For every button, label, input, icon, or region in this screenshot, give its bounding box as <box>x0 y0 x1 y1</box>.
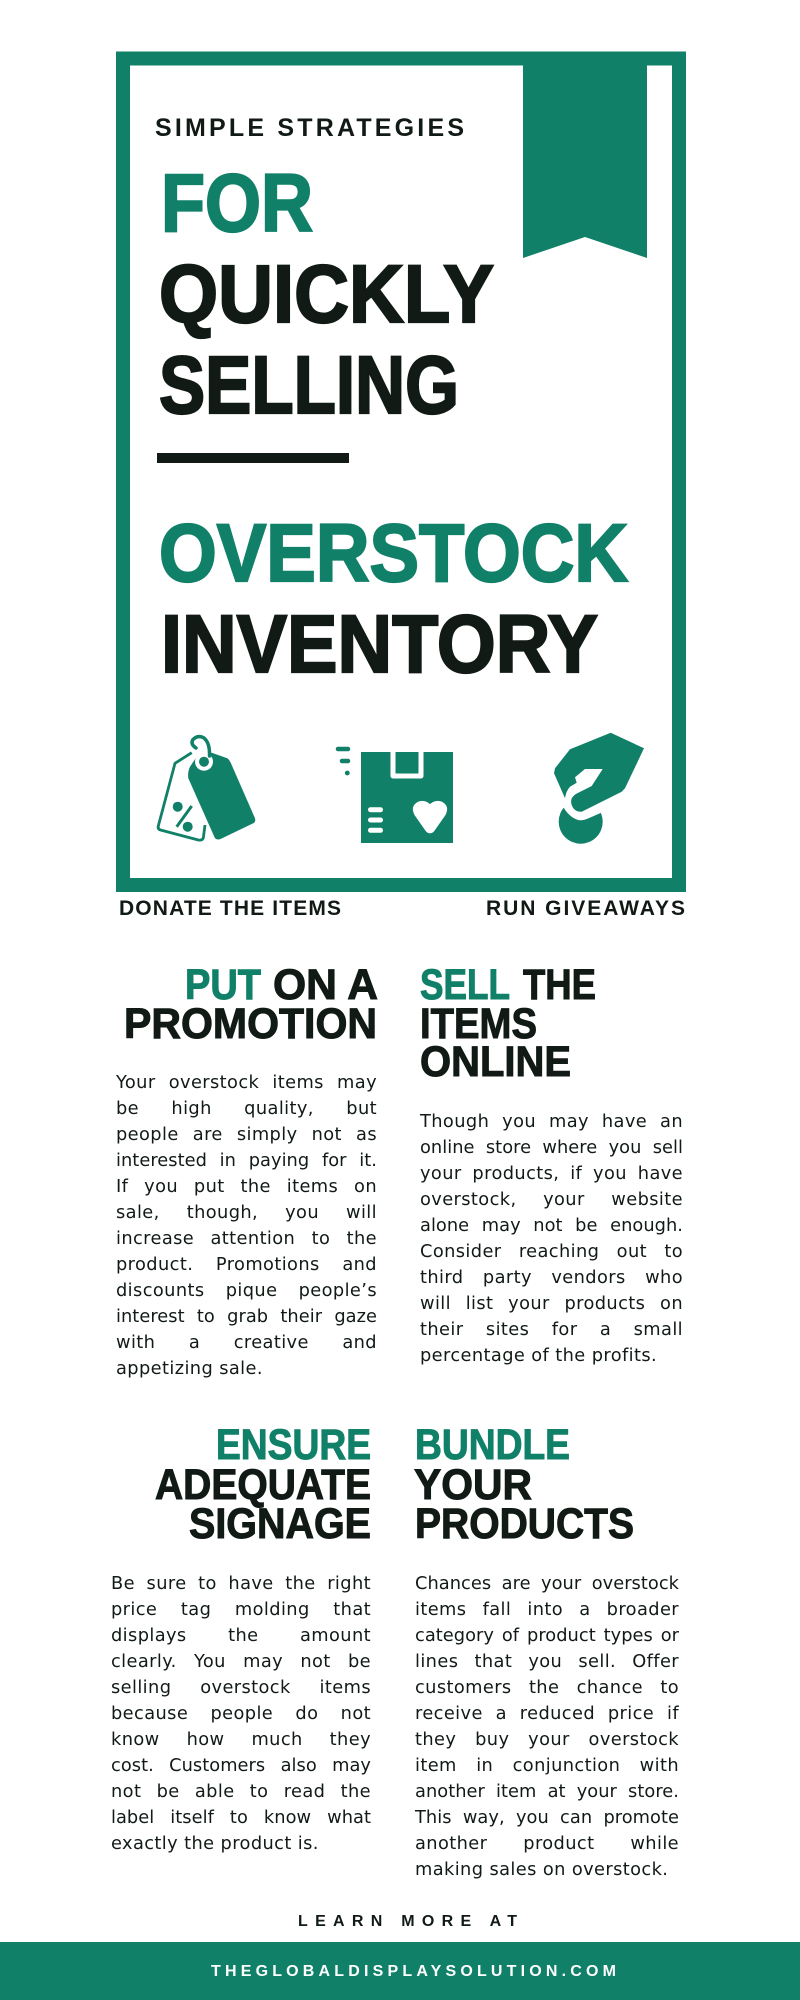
icon: hand holding coin <box>554 733 644 844</box>
heading: bundle your products: PRODUCTS <box>415 1501 634 1548</box>
label: donate the items: DONATE THE ITEMS <box>119 897 341 920</box>
text block: ensure adequate signage: price tag molding that <box>111 1599 371 1620</box>
title: overstock inventory <box>159 508 628 690</box>
text block: ensure adequate signage: cost. Customers also may <box>111 1755 371 1776</box>
heading: bundle your products: YOUR <box>414 1462 532 1509</box>
text block: bundle your products: they buy your overstock <box>415 1729 679 1750</box>
heading: ensure adequate signage: ENSURE <box>216 1422 371 1469</box>
text block: put on a promotion: people are simply not as <box>116 1124 377 1145</box>
text block: ensure adequate signage <box>111 1573 371 1854</box>
heading: ensure adequate signage <box>155 1422 371 1548</box>
text block: sell the items online: percentage of the profits. <box>420 1345 657 1366</box>
icon: price tags <box>158 737 255 840</box>
text block: put on a promotion: interested in paying for it. <box>116 1150 377 1171</box>
text block: ensure adequate signage: displays the amount <box>111 1625 371 1646</box>
text block: put on a promotion: Your overstock items may <box>116 1072 377 1093</box>
text block: bundle your products: item in conjunction with <box>415 1755 679 1776</box>
text block: put on a promotion: with a creative and <box>116 1332 377 1353</box>
text block: sell the items online <box>420 1111 683 1366</box>
text block: ensure adequate signage: know how much they <box>111 1729 371 1750</box>
text block: sell the items online: overstock, your website <box>420 1189 683 1210</box>
text block: put on a promotion: sale, though, you will <box>116 1202 377 1223</box>
heading: bundle your products <box>414 1422 634 1548</box>
title: overstock inventory: INVENTORY <box>161 599 598 690</box>
title: for quickly selling: FOR <box>161 158 313 249</box>
text block: put on a promotion: be high quality, but <box>116 1098 377 1119</box>
text block: bundle your products: receive a reduced price if <box>415 1703 679 1724</box>
text block: bundle your products: This way, you can promote <box>415 1807 679 1828</box>
heading: put on a promotion <box>124 962 378 1048</box>
text block: bundle your products: Chances are your overstock <box>415 1573 679 1594</box>
text block: bundle your products: another item at your store. <box>415 1781 679 1802</box>
text block: sell the items online: their sites for a small <box>420 1319 683 1340</box>
heading: sell the items online: ITEMS <box>420 1001 537 1048</box>
text block: sell the items online: online store where you sell <box>420 1137 683 1158</box>
heading: put on a promotion: ON A <box>273 962 378 1009</box>
text block: sell the items online: Though you may have an <box>420 1111 683 1132</box>
text block: bundle your products: lines that you sell. Offer <box>415 1651 679 1672</box>
text block: put on a promotion: product. Promotions and <box>116 1254 377 1275</box>
text block: ensure adequate signage: Be sure to have the right <box>111 1573 371 1594</box>
icon: package with heart <box>338 749 453 843</box>
text block: ensure adequate signage: not be able to read the <box>111 1781 371 1802</box>
text block: sell the items online: will list your products on <box>420 1293 683 1314</box>
text block: put on a promotion: increase attention to the <box>116 1228 377 1249</box>
title: for quickly selling: SELLING <box>159 340 459 431</box>
label: learn more at: LEARN MORE AT <box>298 1913 517 1930</box>
heading: simple strategies: SIMPLE STRATEGIES <box>155 114 464 142</box>
footer url: THEGLOBALDISPLAYSOLUTION.COM <box>211 1963 616 1980</box>
text block: ensure adequate signage: because people do not <box>111 1703 371 1724</box>
heading: put on a promotion: PUT <box>185 962 261 1009</box>
text block: ensure adequate signage: exactly the product is. <box>111 1833 319 1854</box>
title: overstock inventory: OVERSTOCK <box>159 508 628 599</box>
text block: bundle your products: another product while <box>415 1833 679 1854</box>
text block: put on a promotion: If you put the items on <box>116 1176 377 1197</box>
text block: ensure adequate signage: label itself to know what <box>111 1807 371 1828</box>
text block: sell the items online: alone may not be enough. <box>420 1215 683 1236</box>
text block: sell the items online: third party vendors who <box>420 1267 683 1288</box>
text block: bundle your products: customers the chance to <box>415 1677 679 1698</box>
text block: put on a promotion: discounts pique people’s <box>116 1280 377 1301</box>
heading: sell the items online: SELL <box>420 962 510 1009</box>
text block: sell the items online: your products, if you have <box>420 1163 683 1184</box>
icon: bookmark ribbon <box>523 60 647 258</box>
text block: put on a promotion: appetizing sale. <box>116 1358 263 1379</box>
text block: put on a promotion <box>116 1072 377 1379</box>
heading: ensure adequate signage: SIGNAGE <box>189 1501 371 1548</box>
heading: put on a promotion: PROMOTION <box>124 1001 377 1048</box>
label: run giveaways: RUN GIVEAWAYS <box>486 897 685 920</box>
heading: bundle your products: BUNDLE <box>415 1422 570 1469</box>
text block: bundle your products <box>414 1573 679 1880</box>
text block: bundle your products: category of product types or <box>415 1625 679 1646</box>
footer band <box>0 1942 800 2000</box>
text block: ensure adequate signage: clearly. You may not be <box>111 1651 371 1672</box>
title: for quickly selling: QUICKLY <box>159 249 494 340</box>
title rule <box>157 453 349 463</box>
title: for quickly selling <box>159 158 494 431</box>
text block: bundle your products: making sales on overstock. <box>415 1859 668 1880</box>
heading: sell the items online <box>420 962 596 1086</box>
panel: title frame <box>123 58 679 885</box>
heading: sell the items online: THE <box>523 962 596 1009</box>
heading: sell the items online: ONLINE <box>420 1039 571 1086</box>
text block: ensure adequate signage: selling overstock items <box>111 1677 371 1698</box>
text block: put on a promotion: interest to grab their gaze <box>116 1306 377 1327</box>
heading: ensure adequate signage: ADEQUATE <box>155 1462 371 1509</box>
text block: bundle your products: items fall into a broader <box>415 1599 679 1620</box>
text block: sell the items online: Consider reaching out to <box>420 1241 683 1262</box>
